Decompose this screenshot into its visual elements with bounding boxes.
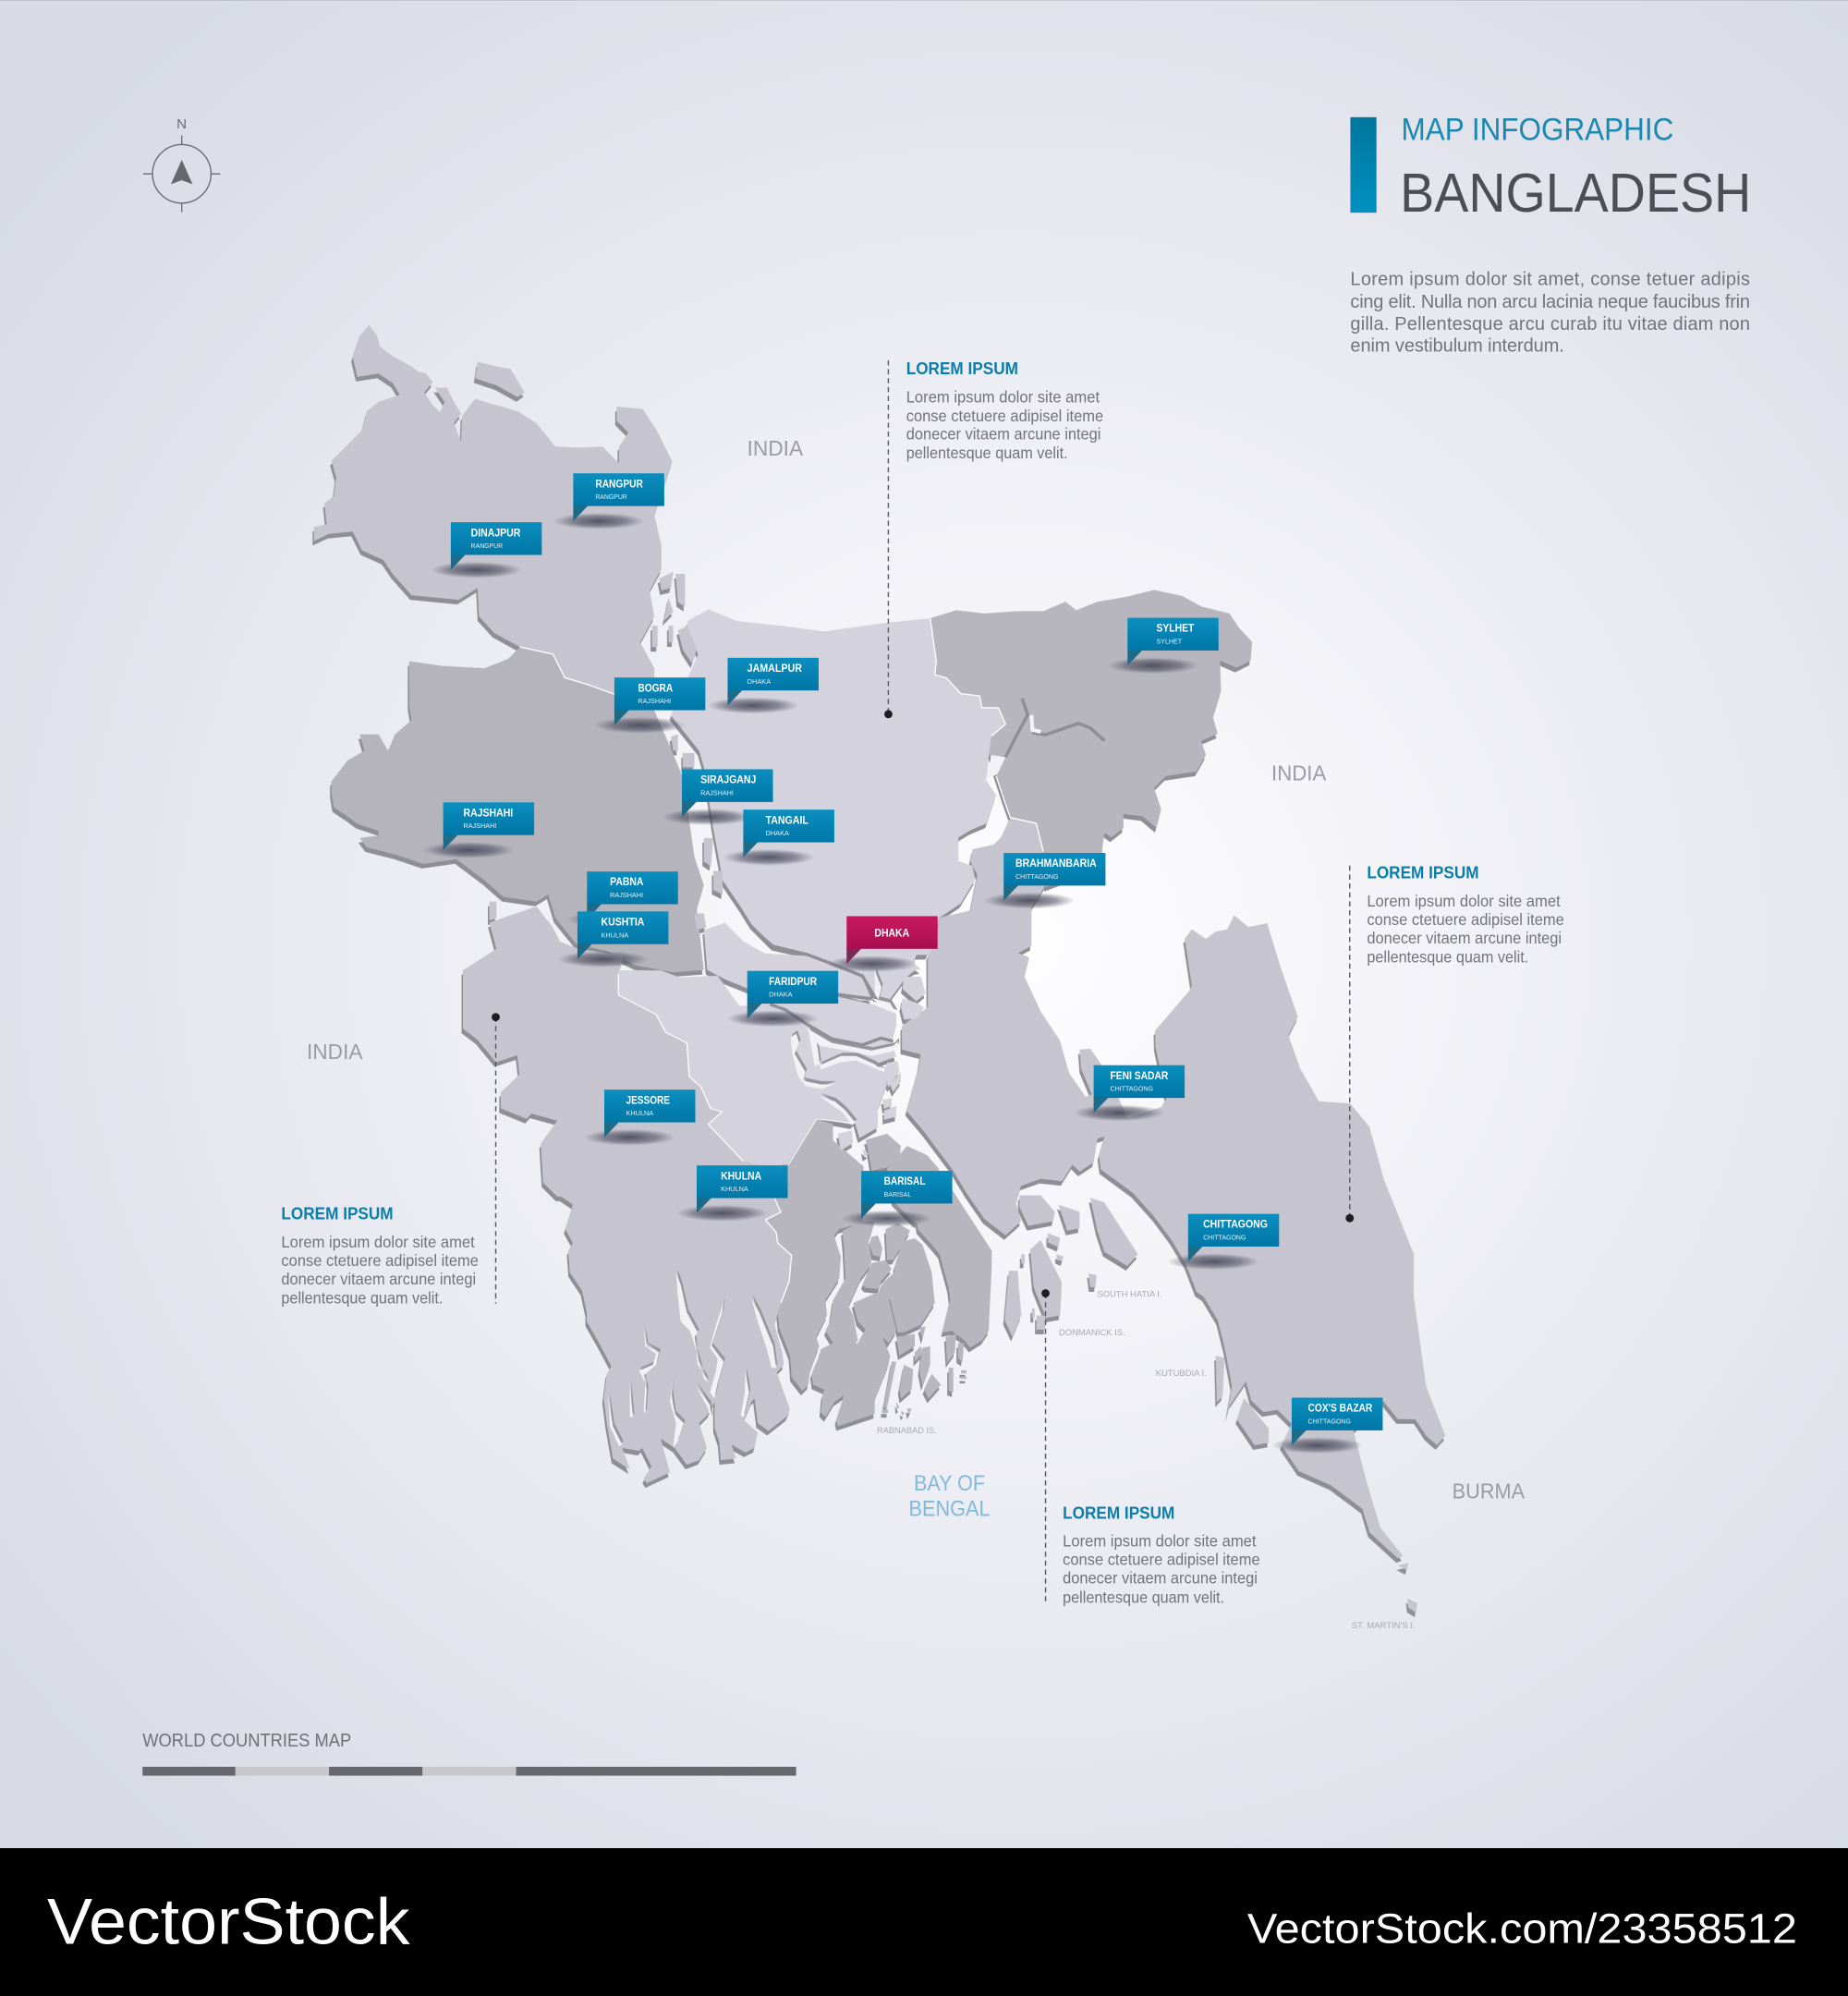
callout: south: LOREM IPSUM — [1063, 1503, 1174, 1522]
footer bar: VectorStock.com/23358512 — [1247, 1905, 1797, 1953]
marker: Sylhet: SYLHET — [1157, 638, 1182, 646]
icon: north compass — [143, 116, 220, 212]
callout: south: conse ctetuere adipisel iteme — [1063, 1551, 1260, 1569]
region: Rangpur — [314, 325, 673, 694]
region: Khulna south and Sundarbans — [554, 1183, 792, 1483]
callout: south: donecer vitaem arcune integi — [1063, 1569, 1258, 1588]
region: Barisal north — [788, 1119, 864, 1183]
neighbouring country and sea labels — [307, 436, 1525, 1522]
marker: Sylhet: SYLHET — [1157, 623, 1195, 635]
marker: Brahmanbaria: CHITTAGONG — [1015, 872, 1058, 881]
marker: Jamalpur: DHAKA — [748, 677, 772, 686]
marker: Brahmanbaria — [983, 853, 1105, 909]
marker: Kushtia — [557, 911, 668, 968]
callout: west: conse ctetuere adipisel iteme — [281, 1251, 479, 1270]
title block: BANGLADESH — [1400, 162, 1751, 224]
footer bar — [0, 1848, 1848, 1996]
callout: east: conse ctetuere adipisel iteme — [1367, 910, 1564, 929]
Sylhet inner channel — [1005, 699, 1104, 757]
marker: Cox's Bazar: CHITTAGONG — [1308, 1417, 1351, 1425]
marker: Dinajpur — [431, 522, 541, 578]
intro paragraph — [1350, 270, 1750, 356]
marker: Tangail: TANGAIL — [766, 814, 808, 826]
marker: Jamalpur: JAMALPUR — [748, 663, 802, 675]
marker: Faridpur: FARIDPUR — [769, 976, 818, 988]
footer bar: VectorStock — [47, 1884, 410, 1957]
marker: Faridpur — [727, 971, 838, 1027]
marker: Rangpur — [553, 473, 664, 529]
island labels: ST. MARTIN'S I. — [1352, 1621, 1416, 1631]
callout: south: Lorem ipsum dolor site amet — [1063, 1532, 1257, 1551]
marker: Barisal: BARISAL — [884, 1175, 926, 1187]
marker: Feni Sadar: CHITTAGONG — [1111, 1085, 1153, 1093]
marker: Tangail: DHAKA — [766, 829, 790, 837]
Barisal west finger — [765, 1164, 862, 1391]
island labels — [877, 1290, 1416, 1631]
marker: Cox's Bazar: COX'S BAZAR — [1308, 1403, 1373, 1415]
neighbouring country and sea labels: BURMA — [1453, 1479, 1525, 1503]
Sundarbans channels — [608, 970, 898, 1448]
callout: north: LOREM IPSUM — [906, 359, 1018, 378]
marker: Sirajganj: SIRAJGANJ — [700, 774, 756, 786]
marker: Kushtia: KHULNA — [602, 931, 629, 939]
intro paragraph: gilla. Pellentesque arcu curab itu vitae diam non — [1350, 314, 1750, 335]
region border lines — [520, 647, 614, 694]
marker: Feni Sadar — [1074, 1065, 1185, 1121]
marker: Sylhet — [1107, 618, 1219, 674]
callout: east: pellentesque quam velit. — [1367, 947, 1528, 966]
marker: Sirajganj — [662, 769, 773, 825]
title block — [1350, 113, 1751, 224]
callout: south — [1041, 1289, 1260, 1606]
callout: north: donecer vitaem arcune integi — [906, 424, 1100, 443]
marker: Jessore: KHULNA — [626, 1109, 654, 1117]
island labels: KUTUBDIA I. — [1156, 1369, 1207, 1379]
river islands near Chittagong — [838, 977, 926, 1157]
coastal islands — [1004, 1195, 1417, 1613]
marker: Kushtia: KUSHTIA — [602, 916, 645, 928]
marker: Rajshahi: RAJSHAHI — [464, 807, 513, 819]
marker: Rajshahi — [423, 802, 534, 858]
marker: Dhaka capital — [826, 916, 938, 972]
callout: east: LOREM IPSUM — [1367, 863, 1479, 882]
neighbouring country and sea labels: BENGAL — [908, 1497, 991, 1522]
neighbouring country and sea labels: INDIA — [307, 1040, 363, 1064]
marker: Bogra: RAJSHAHI — [638, 697, 671, 705]
island labels: SOUTH HATIA I. — [1097, 1290, 1162, 1300]
marker: Bogra — [594, 677, 705, 734]
marker: Jessore: JESSORE — [626, 1094, 670, 1106]
Dhaka river strip — [704, 923, 872, 1003]
callout: east — [1345, 863, 1564, 1223]
callout: north: conse ctetuere adipisel iteme — [906, 407, 1103, 425]
neighbouring country and sea labels: INDIA — [1271, 761, 1327, 785]
world countries map caption and segmented bar — [142, 1731, 796, 1776]
neighbouring country and sea labels: BAY OF — [914, 1471, 985, 1496]
marker: Faridpur: DHAKA — [769, 991, 793, 999]
marker: Jamalpur — [707, 658, 819, 713]
region: Dhaka north — [671, 609, 1005, 1001]
Barisal delta islands — [811, 1189, 991, 1426]
callout: west: pellentesque quam velit. — [281, 1289, 443, 1308]
callout: east: Lorem ipsum dolor site amet — [1367, 892, 1561, 910]
callout: north: Lorem ipsum dolor site amet — [906, 387, 1100, 406]
marker: Pabna: RAJSHAHI — [610, 891, 643, 899]
region: Dhaka south — [618, 970, 755, 1163]
marker: Dhaka capital: DHAKA — [874, 927, 910, 939]
callout: west — [281, 1013, 500, 1308]
island labels: DONMANICK IS. — [1059, 1328, 1125, 1338]
delta channels — [791, 970, 898, 1125]
callout: west: Lorem ipsum dolor site amet — [281, 1233, 475, 1251]
Barisal upper delta islands — [866, 1134, 954, 1226]
marker: Dinajpur: DINAJPUR — [471, 527, 521, 539]
map of Bangladesh — [314, 325, 1445, 1613]
Jamuna river islands — [490, 572, 723, 930]
title block: MAP INFOGRAPHIC — [1402, 113, 1673, 148]
marker: Pabna: PABNA — [610, 876, 644, 888]
callout: west: LOREM IPSUM — [281, 1204, 394, 1223]
marker: Chittagong: CHITTAGONG — [1203, 1219, 1268, 1231]
intro paragraph: enim vestibulum interdum. — [1350, 335, 1564, 356]
marker: Khulna: KHULNA — [721, 1170, 762, 1182]
island labels: RABNABAD IS. — [877, 1426, 937, 1436]
callout: north: pellentesque quam velit. — [906, 444, 1068, 462]
callout: south: pellentesque quam velit. — [1063, 1588, 1224, 1606]
marker: Tangail — [723, 809, 834, 866]
marker: Rangpur: RANGPUR — [595, 493, 627, 501]
callout: north — [884, 359, 1103, 718]
marker: Barisal — [841, 1171, 953, 1227]
marker: Khulna — [676, 1165, 787, 1222]
icon: north compass: N — [176, 116, 187, 132]
marker: Rangpur: RANGPUR — [595, 478, 643, 490]
river cliff shadows — [758, 933, 894, 1045]
region: Chittagong — [902, 818, 1445, 1558]
marker: Brahmanbaria: BRAHMANBARIA — [1015, 858, 1097, 870]
marker: Feni Sadar: FENI SADAR — [1111, 1070, 1169, 1082]
marker: Bogra: BOGRA — [638, 682, 674, 694]
marker: Sirajganj: RAJSHAHI — [700, 788, 734, 797]
neighbouring country and sea labels: INDIA — [748, 436, 804, 460]
marker: Cox's Bazar — [1271, 1398, 1382, 1454]
intro paragraph: Lorem ipsum dolor sit amet, conse tetuer adipis — [1350, 270, 1750, 290]
intro paragraph: cing elit. Nulla non arcu lacinia neque faucibus frin — [1350, 292, 1750, 312]
region: Sylhet — [930, 590, 1252, 887]
region: Khulna north — [463, 907, 788, 1197]
enclave north of Rangpur — [475, 362, 525, 397]
marker: Pabna — [566, 871, 678, 928]
world countries map caption and segmented bar: WORLD COUNTRIES MAP — [142, 1731, 351, 1751]
marker: Dinajpur: RANGPUR — [471, 542, 503, 550]
marker: Chittagong — [1168, 1214, 1279, 1270]
marker: Chittagong: CHITTAGONG — [1203, 1234, 1246, 1242]
marker: Rajshahi: RAJSHAHI — [464, 822, 496, 830]
marker: Jessore — [584, 1089, 695, 1146]
region: Rajshahi — [332, 647, 704, 972]
callout: west: donecer vitaem arcune integi — [281, 1270, 476, 1288]
marker: Barisal: BARISAL — [884, 1190, 912, 1199]
rivers and white channels on the map — [520, 618, 1104, 1448]
marker: Khulna: KHULNA — [721, 1185, 749, 1193]
Dhaka south delta land — [751, 996, 896, 1167]
callout: east: donecer vitaem arcune integi — [1367, 929, 1562, 947]
